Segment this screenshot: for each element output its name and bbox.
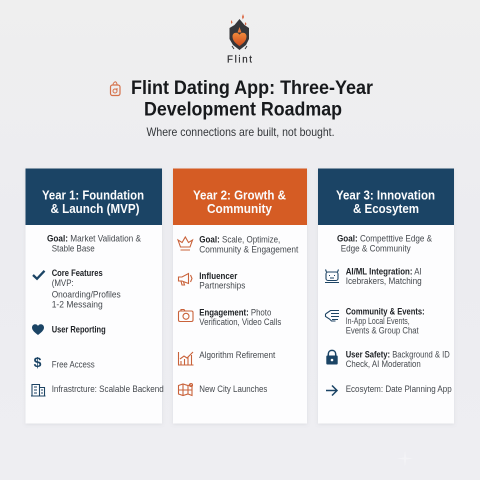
goal — [337, 234, 432, 254]
item: influencer: Partnerships — [199, 281, 246, 291]
item: community events: Events & Group Chat — [346, 325, 419, 335]
heading: Year 2 — [173, 168, 307, 225]
item: user safety — [346, 349, 450, 369]
icon: padlock — [326, 350, 338, 364]
item: community events: Community & Events: — [346, 306, 425, 316]
goal: Goal: Market Validation & — [47, 234, 141, 244]
item: engagement — [199, 307, 282, 327]
title: Flint Dating App: Three-Year — [131, 77, 373, 99]
icon: camera — [178, 310, 193, 322]
item: user reporting: User Reporting — [52, 324, 106, 334]
item: community events — [346, 306, 425, 335]
item: city launches: New City Launches — [199, 384, 268, 394]
icon: arrow — [326, 386, 337, 396]
item: core features: Onoarding/Profiles — [52, 290, 121, 300]
item: community events: In-App Local Events, — [346, 316, 410, 326]
goal: Stable Base — [52, 244, 95, 254]
item: core features: Core Features — [52, 268, 103, 278]
goal: Edge & Community — [341, 244, 411, 254]
title: Development Roadmap — [144, 98, 342, 120]
item: engagement: Engagement: Photo — [199, 307, 271, 317]
icon: crown — [178, 237, 192, 250]
icon: dollar: $ — [34, 354, 42, 370]
goal — [199, 235, 299, 254]
item: AI/ML — [346, 266, 422, 286]
goal: Goal: Competttive Edge & — [337, 234, 432, 244]
icon: megaphone — [178, 274, 192, 285]
heading: Year 3: Year 3: Innovation — [336, 188, 435, 202]
item: infrastructure: Infrastrcture: Scalable Backend — [52, 384, 164, 394]
heading: Year 1 — [26, 168, 162, 225]
heading: Year 1: Year 1: Foundation — [42, 188, 144, 202]
item: engagement: Verification, Video Calls — [199, 317, 282, 327]
heading: Year 3: & Ecosytem — [353, 202, 419, 216]
item: core features — [52, 268, 121, 310]
item: influencer: Influencer — [199, 271, 238, 281]
item: user safety: User Safety: Background & ID — [346, 349, 450, 359]
title — [131, 77, 373, 120]
logo wordmark: Flint — [227, 54, 252, 66]
icon: growth chart — [178, 352, 194, 365]
icon: heart — [32, 324, 44, 335]
goal: Community & Engagement — [199, 244, 299, 254]
goal: Goal: Scale, Optimize, — [199, 235, 280, 245]
item: ecosystem: Ecosytem: Date Planning App — [346, 384, 452, 394]
title icon — [110, 82, 120, 96]
panel: Year 3 — [318, 168, 454, 424]
decorative sparkle — [396, 450, 414, 467]
icon: map — [178, 384, 192, 396]
item: AI/ML: AI/ML Integration: AI — [346, 266, 422, 276]
icon: robot — [325, 270, 339, 282]
item: free access: Free Access — [52, 359, 95, 369]
icon: check — [33, 271, 44, 279]
heading: Year 1: & Launch (MVP) — [50, 202, 140, 216]
panel: Year 1 — [26, 168, 164, 424]
icon: building — [31, 384, 46, 396]
item: AI/ML: Icebrakers, Matching — [346, 276, 422, 286]
item: user safety: Check, AI Moderation — [346, 359, 421, 369]
goal — [47, 234, 141, 254]
heading: Year 2: Year 2: Growth & — [193, 188, 286, 202]
heading: Year 3 — [318, 168, 454, 225]
heading: Year 2: Community — [207, 202, 272, 216]
logo: Flint — [227, 14, 252, 66]
item: algorithm: Algorithm Refirement — [199, 350, 276, 360]
icon: handshake — [326, 310, 339, 321]
icon: flame shield — [230, 14, 249, 50]
item: core features: 1-2 Messaing — [52, 300, 103, 310]
item: influencer — [199, 271, 246, 291]
subtitle: Where connections are built, not bought. — [146, 125, 334, 139]
item: core features: (MVP: — [52, 278, 74, 288]
panel: Year 2 — [173, 168, 307, 424]
